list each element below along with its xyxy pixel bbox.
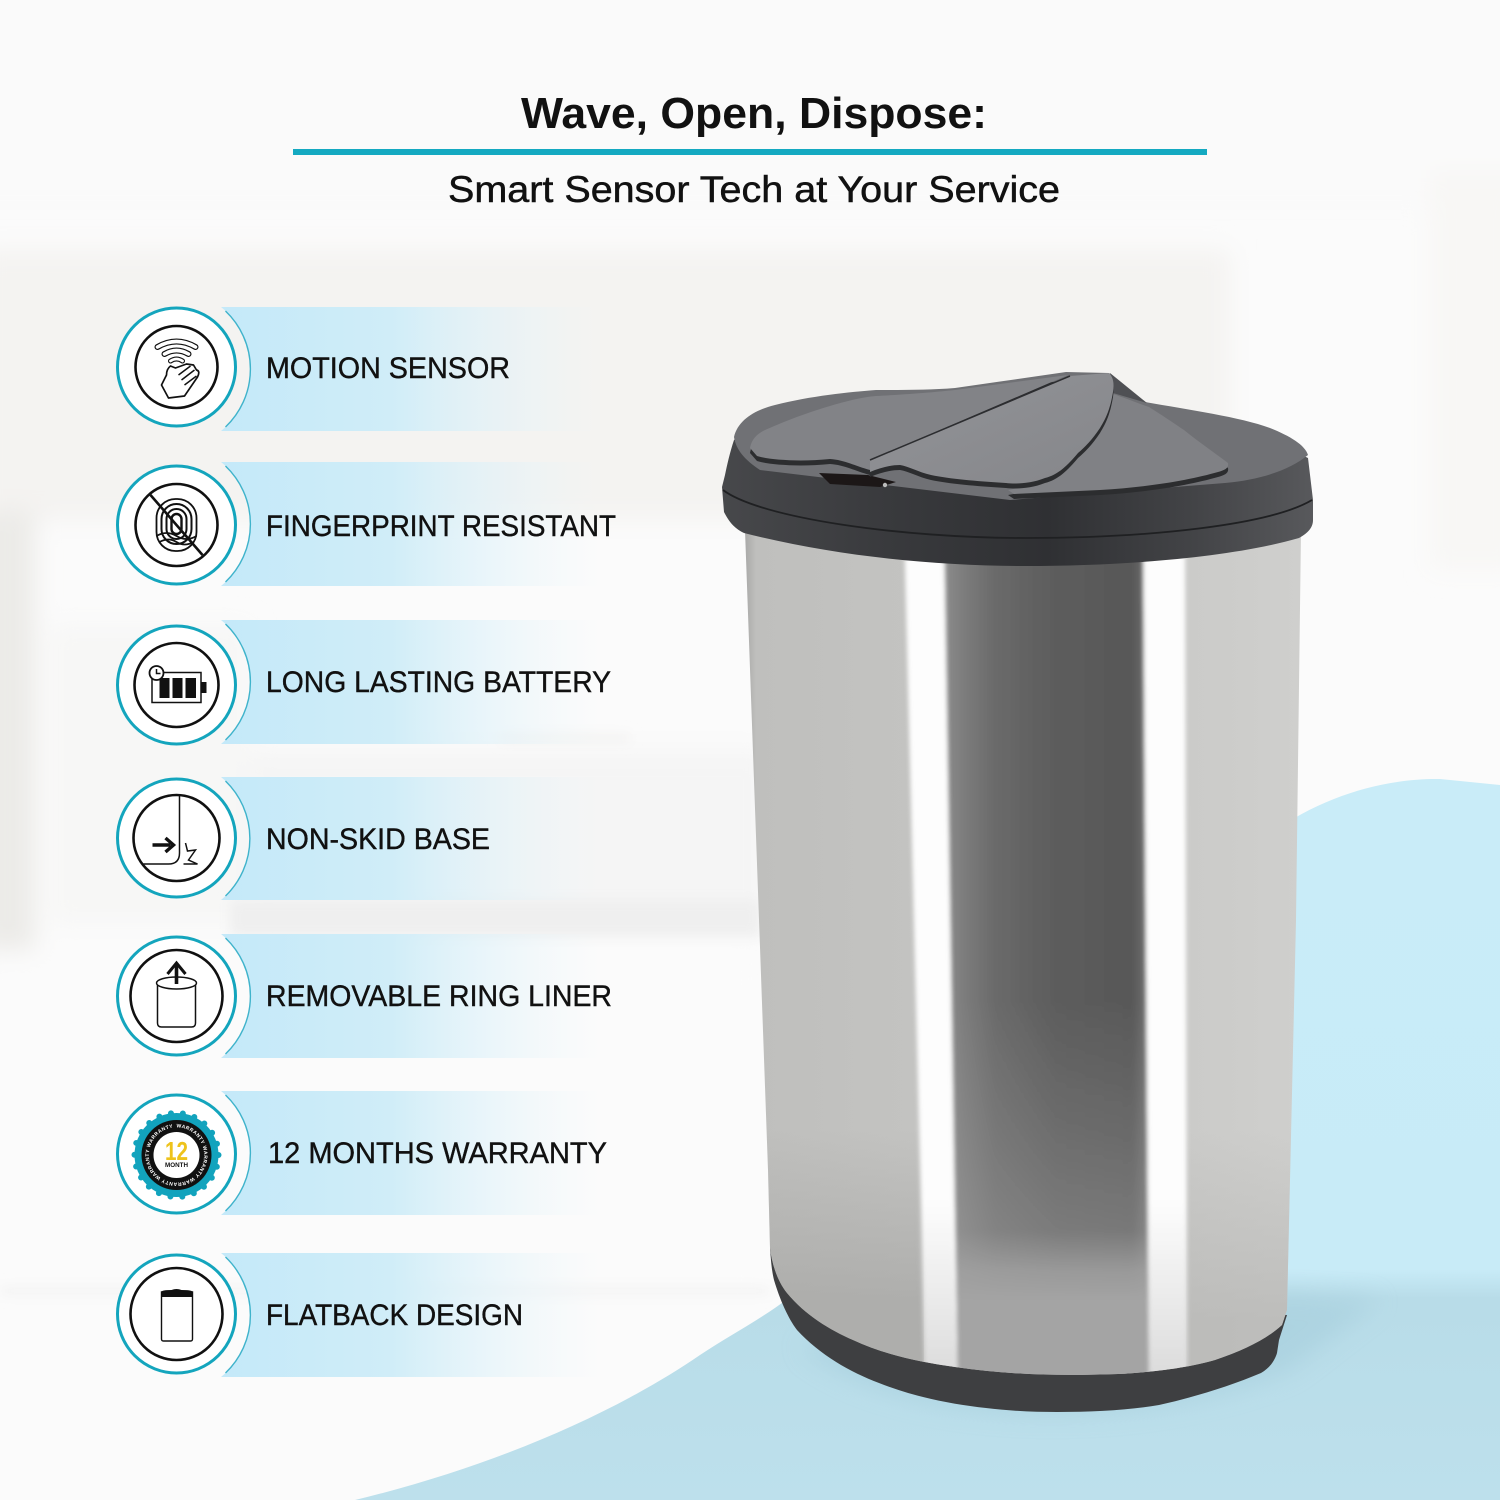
lid left flap bbox=[750, 375, 1068, 475]
icon: battery with clock bbox=[134, 643, 218, 727]
icon: hand wave bbox=[136, 326, 218, 408]
title: Wave, Open, Dispose: bbox=[521, 89, 987, 138]
lid center flap bbox=[870, 373, 1114, 488]
bin base bbox=[770, 1248, 1287, 1412]
lid hinge wedge bbox=[1110, 373, 1147, 403]
lid top bbox=[734, 372, 1308, 500]
feature: long lasting battery bbox=[118, 620, 611, 744]
shadow under bin bbox=[800, 1295, 1380, 1413]
feature: fingerprint resistant bbox=[118, 462, 616, 586]
label: LONG LASTING BATTERY bbox=[266, 666, 611, 699]
subtitle: Smart Sensor Tech at Your Service bbox=[448, 169, 1060, 210]
feature: non-skid base bbox=[118, 777, 600, 900]
lid right flap bbox=[1008, 394, 1228, 499]
icon: warranty badge: MONTH bbox=[165, 1162, 188, 1169]
lid rim bbox=[722, 420, 1313, 566]
label: FLATBACK DESIGN bbox=[266, 1299, 523, 1332]
label: NON-SKID BASE bbox=[266, 823, 490, 856]
lid sensor window bbox=[819, 473, 896, 487]
feature: motion sensor bbox=[118, 307, 600, 431]
icon: liner with up arrow bbox=[130, 950, 222, 1042]
icon: flatback bin bbox=[130, 1268, 222, 1360]
title divider line bbox=[293, 149, 1207, 155]
feature: removable ring liner bbox=[118, 934, 612, 1058]
label: FINGERPRINT RESISTANT bbox=[266, 510, 616, 543]
label: 12 MONTHS WARRANTY bbox=[268, 1137, 607, 1170]
label: MOTION SENSOR bbox=[266, 352, 510, 385]
label: REMOVABLE RING LINER bbox=[266, 980, 612, 1013]
bin body bbox=[735, 525, 1305, 1405]
icon: warranty badge: 12 bbox=[165, 1136, 188, 1166]
icon: warranty badge bbox=[132, 1110, 222, 1200]
icon: non-skid foot bbox=[134, 795, 220, 881]
feature: 12 months warranty bbox=[116, 1091, 607, 1215]
feature: flatback design bbox=[118, 1253, 600, 1377]
product: stainless steel sensor bin bbox=[722, 372, 1313, 1412]
icon: warranty badge: WARRANTY WARRANTY WARRANTY WARRANTY WARRANTY bbox=[145, 1124, 208, 1186]
icon: crossed fingerprint bbox=[136, 484, 218, 566]
blue wave shape bbox=[355, 779, 1500, 1500]
